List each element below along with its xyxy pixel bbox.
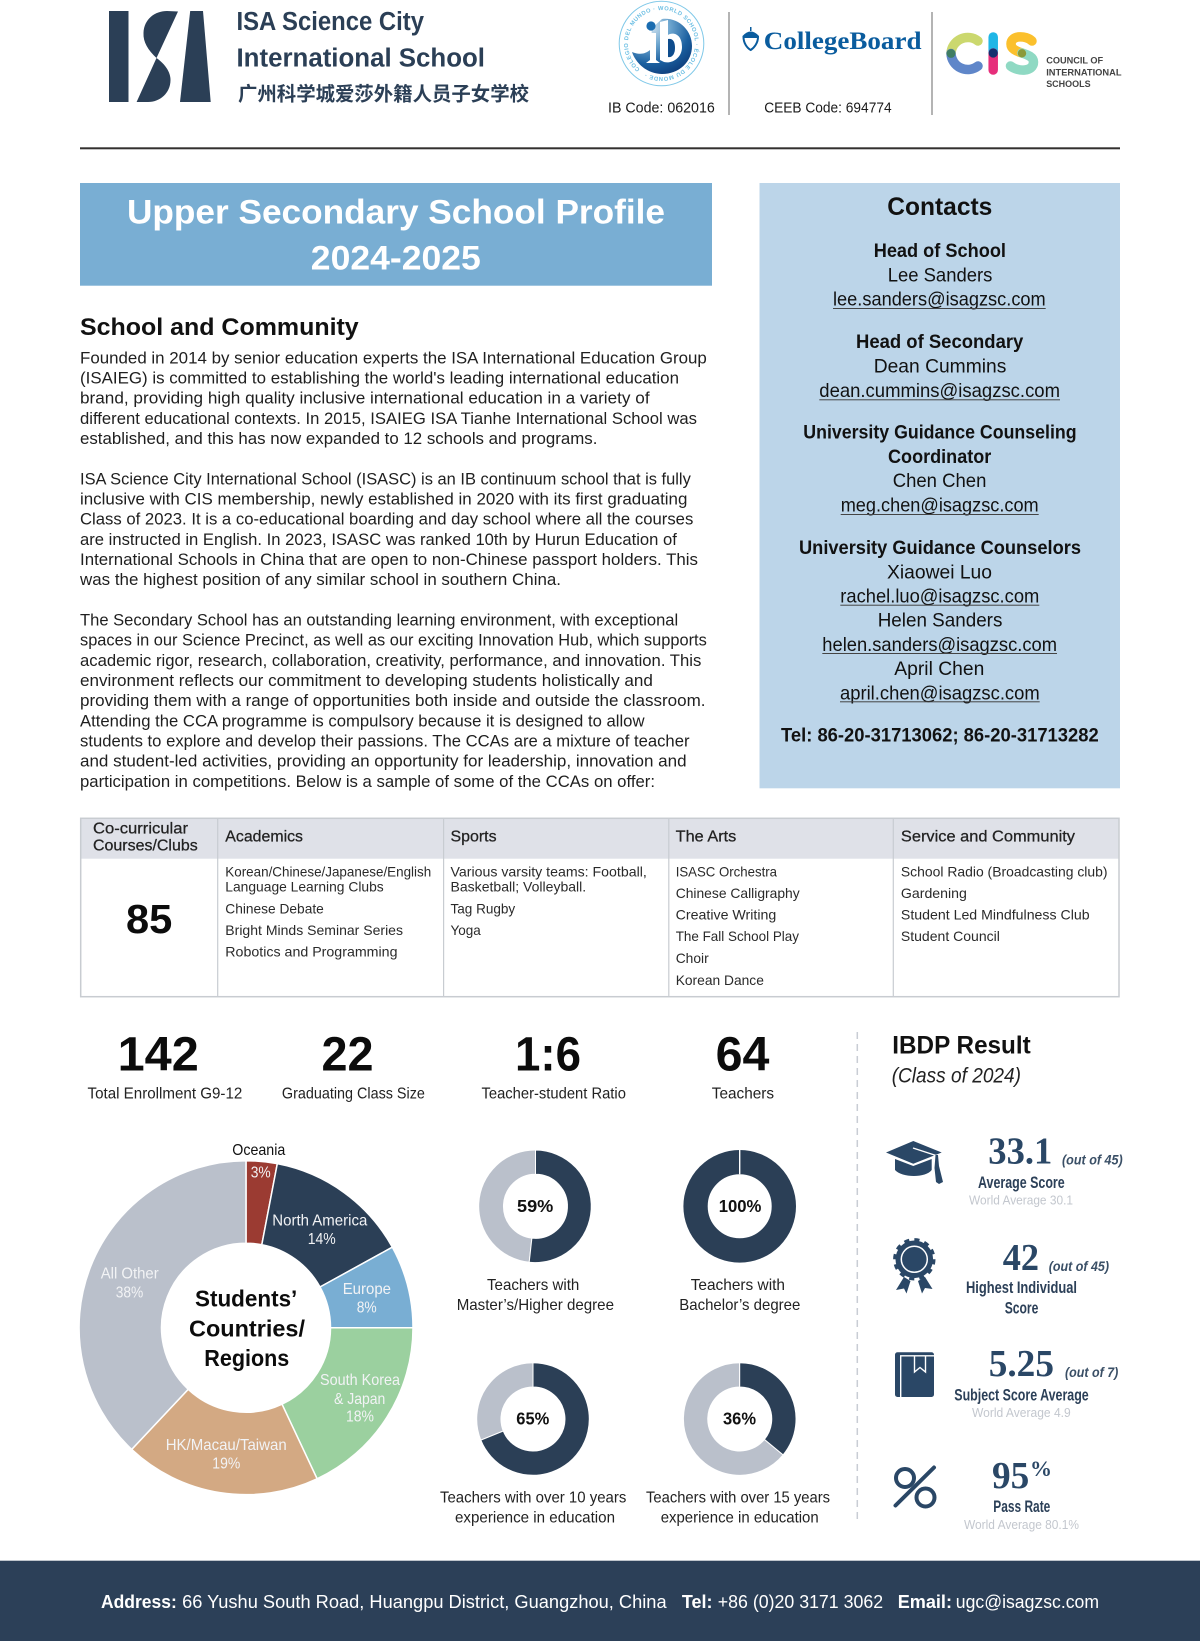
table body rows: Creative Writing	[676, 906, 776, 922]
text block: school and community: environment reflects our commitment to developing students holistically and	[80, 671, 653, 690]
table header row: Co-curricular	[93, 820, 188, 837]
stat: teachers: Teachers	[712, 1085, 774, 1102]
stat: highest individual score: Highest Individual	[966, 1279, 1077, 1297]
logo: CIS: INTERNATIONAL	[1046, 67, 1122, 78]
icon: percent	[896, 1468, 934, 1506]
panel: contacts: Helen Sanders	[878, 610, 1003, 632]
logo: ISA mark	[109, 11, 211, 102]
heading: School and Community: School and Community	[80, 314, 359, 341]
chart: teachers with over 15 years experience: experience in education	[661, 1510, 819, 1527]
school name: 广州科学城爱莎外籍人员子女学校	[238, 82, 530, 106]
donut labels: All Other	[101, 1266, 159, 1283]
table header row: Sports	[450, 829, 497, 846]
donut labels: 3%	[251, 1164, 271, 1181]
stat: average score	[969, 1131, 1123, 1208]
donut labels: North America	[272, 1212, 367, 1229]
table body rows: Language Learning Clubs	[225, 879, 384, 895]
icon: book	[895, 1352, 934, 1397]
table body rows: Bright Minds Seminar Series	[225, 922, 403, 938]
text block: school and community: spaces in our Science Precinct, as well as our exciting Innovation Hub, which supports	[80, 631, 707, 650]
chart: teachers with over 15 years experience	[646, 1363, 830, 1527]
chart: teachers with over 15 years experience: 36%	[723, 1408, 756, 1428]
footer	[0, 1561, 1200, 1641]
chart: teachers with master's/higher degree: Master’s/Higher degree	[457, 1297, 614, 1314]
table body rows	[225, 864, 1108, 988]
stat: graduating class size: Graduating Class Size	[282, 1085, 425, 1102]
panel: contacts: Head of Secondary	[856, 331, 1023, 353]
school name	[236, 8, 530, 106]
table body rows: Chinese Debate	[225, 900, 324, 916]
stat: teachers	[712, 1028, 774, 1102]
stat: teacher-student ratio: Teacher-student Ratio	[482, 1085, 626, 1102]
stat: subject score average	[954, 1343, 1119, 1420]
text block: school and community: Class of 2023. It is a co-educational boarding and day school where all the courses	[80, 510, 693, 529]
text block: school and community: ISA Science City International School (ISASC) is an IB continuum school that is fully	[80, 469, 691, 488]
chart: teachers with bachelor's degree	[679, 1150, 800, 1314]
title banner	[80, 183, 712, 286]
table body rows: ISASC Orchestra	[676, 864, 777, 880]
CEEB code: CEEB Code: 694774	[764, 100, 892, 117]
table body rows: Student Council	[901, 928, 1000, 944]
icon: graduation cap	[886, 1141, 943, 1184]
table header row	[93, 820, 1075, 855]
title banner: Upper Secondary School Profile	[127, 193, 665, 231]
stat: subject score average: Subject Score Average	[954, 1386, 1089, 1404]
stat: teacher-student ratio	[482, 1028, 626, 1102]
school name: ISA Science City	[236, 8, 425, 36]
donut labels: South Korea	[320, 1372, 400, 1389]
table header row: Academics	[225, 829, 303, 846]
stat: average score: World Average 30.1	[969, 1194, 1073, 1208]
table body rows: Student Led Mindfulness Club	[901, 906, 1090, 922]
logo: CIS: SCHOOLS	[1046, 79, 1091, 90]
panel: contacts: april.chen@isagzsc.com	[840, 682, 1040, 704]
panel: contacts: Contacts	[887, 193, 992, 221]
panel: contacts: Xiaowei Luo	[887, 561, 992, 583]
stat: average score: Average Score	[978, 1174, 1065, 1192]
icon: award ribbon	[895, 1240, 934, 1294]
table body rows: Yoga	[450, 922, 481, 938]
table header row: The Arts	[676, 829, 737, 846]
table body rows: Various varsity teams: Football,	[450, 864, 647, 880]
chart: teachers with over 10 years experience: Teachers with over 10 years	[440, 1490, 626, 1507]
panel: contacts: rachel.luo@isagzsc.com	[840, 586, 1039, 608]
text block: school and community: are instructed in English. In 2023, ISASC was ranked 10th by Hurun Education of	[80, 530, 677, 549]
chart: teachers with over 15 years experience: Teachers with over 15 years	[646, 1490, 830, 1507]
donut labels: HK/Macau/Taiwan	[166, 1437, 287, 1454]
text block: school and community: brand, providing high quality inclusive international education in a variety of	[80, 389, 650, 408]
text block: school and community: was the highest position of any similar school in southern China.	[79, 570, 561, 589]
stat: subject score average: World Average 4.9	[972, 1406, 1071, 1420]
stat: subject score average: 5.25	[989, 1343, 1054, 1385]
stat: average score: (out of 45)	[1062, 1152, 1123, 1168]
chart: teachers with over 10 years experience: 65%	[516, 1408, 550, 1428]
footer: Address:	[101, 1591, 177, 1612]
table body rows: Chinese Calligraphy	[676, 885, 800, 901]
panel: contacts: Tel: 86-20-31713062; 86-20-31713282	[781, 724, 1099, 746]
donut labels: & Japan	[334, 1391, 385, 1408]
panel: contacts: Chen Chen	[893, 470, 986, 492]
footer: 66 Yushu South Road, Huangpu District, Guangzhou, China	[182, 1591, 667, 1612]
panel: contacts: helen.sanders@isagzsc.com	[822, 634, 1057, 656]
table header row: Service and Community	[901, 829, 1075, 846]
chart: teachers with over 10 years experience	[440, 1363, 626, 1527]
stat: pass rate: 95	[992, 1455, 1029, 1497]
chart: teachers with bachelor's degree: 100%	[719, 1196, 762, 1216]
panel: contacts: University Guidance Counseling	[803, 422, 1077, 444]
text block: school and community: inclusive with CIS membership, newly established in 2020 with its first graduating	[80, 490, 687, 508]
panel: contacts: Head of School	[874, 240, 1006, 262]
stat: total enrollment: 142	[118, 1028, 199, 1082]
stat: highest individual score	[966, 1237, 1109, 1317]
panel: contacts: Coordinator	[888, 446, 992, 468]
logo: CIS: COUNCIL OF	[1046, 55, 1103, 66]
text block: school and community: providing them with a range of opportunities both inside and outside the classroom.	[80, 691, 705, 710]
donut centre title: Regions	[204, 1345, 289, 1371]
chart: teachers with bachelor's degree: Teachers with	[691, 1277, 785, 1294]
IB code: IB Code: 062016	[608, 100, 715, 117]
table body rows: Korean/Chinese/Japanese/English	[225, 864, 431, 880]
text block: school and community: Attending the CCA programme is compulsory because it is designed to allow	[80, 711, 646, 730]
text block: school and community: International Schools in China that are open to non-Chinese passport holders. This	[80, 550, 698, 569]
stat: pass rate: %	[1030, 1456, 1052, 1481]
stat: teacher-student ratio: 1:6	[515, 1028, 581, 1082]
donut labels: 19%	[212, 1455, 240, 1472]
table body rows: School Radio (Broadcasting club)	[901, 864, 1108, 880]
text block: school and community: and student-led activities, providing an opportunity for leadership, innovation and	[80, 752, 687, 771]
donut labels: 14%	[308, 1231, 336, 1248]
stat: highest individual score: Score	[1005, 1299, 1038, 1317]
donut centre title: Countries/	[189, 1316, 306, 1342]
donut labels: Oceania	[232, 1142, 285, 1159]
table header row: Courses/Clubs	[93, 838, 198, 855]
title banner: 2024-2025	[311, 239, 481, 277]
chart: teachers with master's/higher degree: Teachers with	[487, 1277, 579, 1294]
table body rows: Choir	[676, 950, 709, 966]
panel: contacts: dean.cummins@isagzsc.com	[819, 380, 1060, 402]
heading: IBDP result: IBDP Result	[892, 1031, 1031, 1059]
footer: Email:	[898, 1591, 952, 1612]
stat: pass rate: Pass Rate	[993, 1498, 1050, 1516]
table body rows: The Fall School Play	[676, 928, 799, 944]
heading: IBDP result	[892, 1031, 1031, 1088]
table body rows: Gardening	[901, 885, 967, 901]
table body rows: Basketball; Volleyball.	[450, 879, 586, 895]
donut labels: Europe	[343, 1281, 391, 1298]
text block: school and community: Founded in 2014 by senior education experts the ISA International Education Group	[80, 348, 707, 367]
logo: CIS	[947, 37, 1122, 90]
panel: contacts: University Guidance Counselors	[799, 537, 1081, 559]
stat: graduating class size	[282, 1028, 425, 1102]
stat: total enrollment	[88, 1028, 242, 1102]
donut labels	[101, 1142, 400, 1472]
text block: school and community: established, and this has now expanded to 12 schools and programs.	[80, 429, 597, 448]
text block: school and community: participation in competitions. Below is a sample of some of the CCAs on offer:	[80, 772, 655, 791]
table: co-curricular courses	[81, 818, 1119, 997]
logo: IB World School: COLEGIO DEL MUNDO · WORLD SCHOOL · ÉCOLE DU MONDE ·	[624, 6, 700, 81]
footer: ugc@isagzsc.com	[956, 1591, 1099, 1612]
school name: International School	[236, 45, 485, 73]
stat: average score: 33.1	[988, 1131, 1052, 1173]
panel: contacts	[760, 183, 1120, 788]
text block: school and community: students to explore and develop their passions. The CCAs are a mixture of teacher	[80, 732, 690, 750]
donut labels: 38%	[116, 1284, 143, 1301]
chart: teachers with over 10 years experience: experience in education	[455, 1510, 615, 1527]
chart: teachers with bachelor's degree: Bachelor’s degree	[679, 1297, 800, 1314]
panel: contacts: meg.chen@isagzsc.com	[841, 495, 1039, 517]
table body rows: Robotics and Programming	[225, 944, 398, 960]
text block: school and community: The Secondary School has an outstanding learning environment, with exceptional	[80, 610, 678, 630]
heading: IBDP result: (Class of 2024)	[892, 1064, 1021, 1088]
chart: students' countries and regions donut	[79, 1142, 413, 1495]
text block: school and community: (ISAIEG) is committed to establishing the world's leading international education	[80, 368, 679, 388]
stat: pass rate: World Average 80.1%	[964, 1518, 1079, 1532]
donut labels: 8%	[357, 1300, 377, 1317]
table body rows: Korean Dance	[676, 972, 764, 988]
footer: Tel:	[682, 1591, 712, 1612]
text block: school and community	[79, 348, 707, 791]
text block: school and community: academic rigor, research, collaboration, creativity, performance, and innovation. This	[80, 651, 701, 670]
text block: school and community: different educational contexts. In 2015, ISAIEG ISA Tianhe International School was	[80, 409, 697, 428]
table body rows: Tag Rugby	[450, 900, 515, 916]
stat: graduating class size: 22	[322, 1028, 374, 1082]
stat: highest individual score: 42	[1003, 1237, 1039, 1279]
chart: teachers with master's/higher degree: 59%	[517, 1196, 554, 1216]
stat: highest individual score: (out of 45)	[1049, 1258, 1109, 1274]
stat: total enrollment: Total Enrollment G9-12	[88, 1085, 242, 1102]
stat: teachers: 64	[716, 1028, 770, 1082]
donut labels: 18%	[346, 1409, 374, 1426]
clubs count: 85	[126, 896, 172, 942]
donut centre title	[189, 1286, 306, 1371]
panel: contacts: April Chen	[894, 658, 984, 680]
stat: pass rate	[964, 1455, 1079, 1532]
stat: subject score average: (out of 7)	[1065, 1364, 1119, 1380]
donut centre title: Students’	[195, 1286, 297, 1312]
panel: contacts: Lee Sanders	[888, 264, 993, 286]
footer: +86 (0)20 3171 3062	[718, 1591, 883, 1612]
logo: College Board: CollegeBoard	[764, 28, 922, 55]
panel: contacts: lee.sanders@isagzsc.com	[833, 289, 1046, 311]
panel: contacts: Dean Cummins	[874, 355, 1007, 377]
chart: teachers with master's/higher degree	[457, 1150, 614, 1314]
